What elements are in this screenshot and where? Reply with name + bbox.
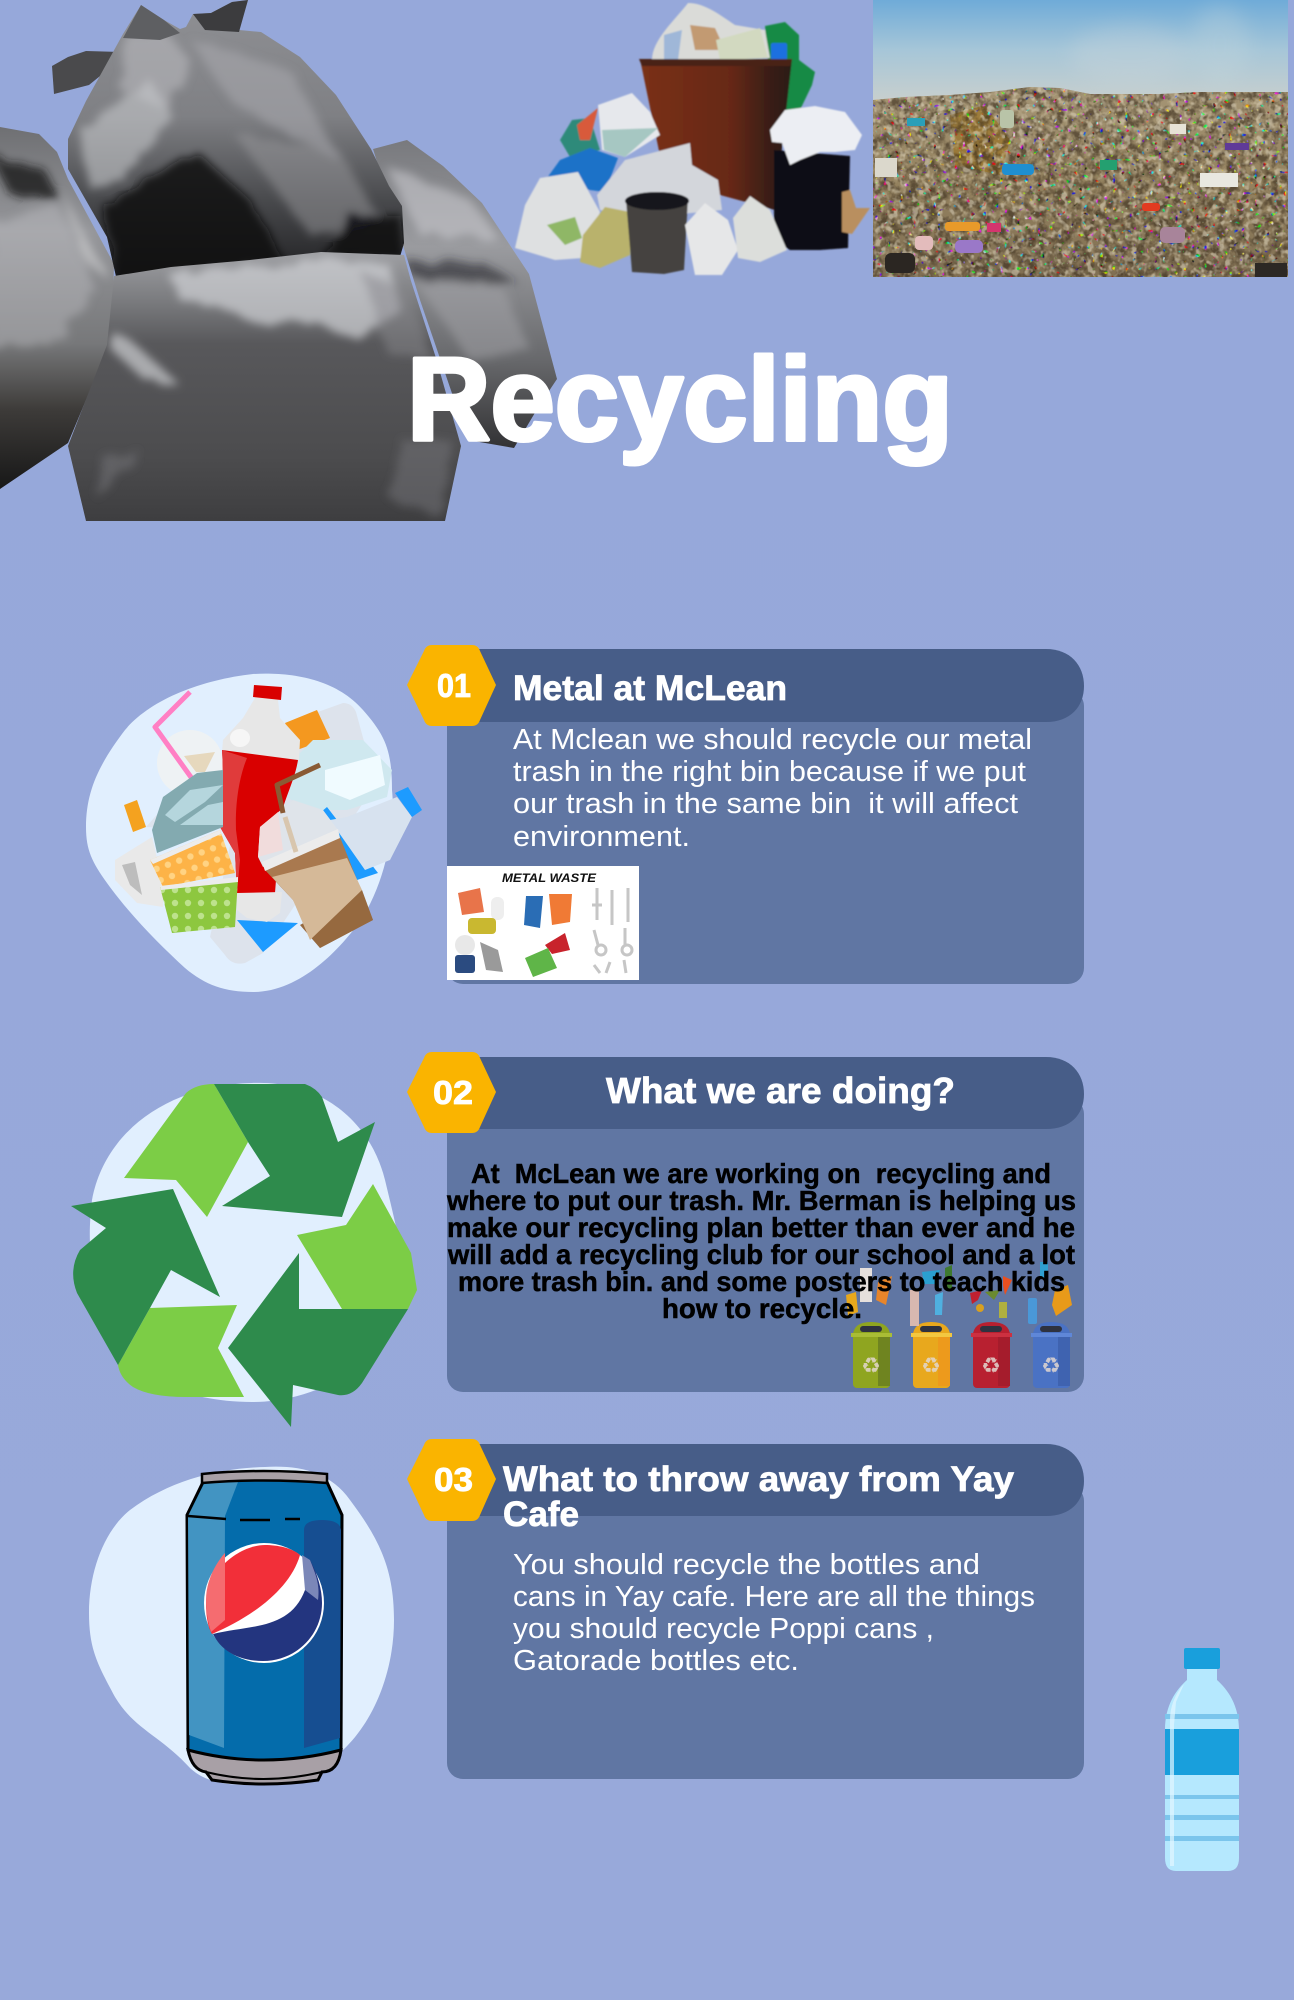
image: metal waste poster: METAL WASTE — [502, 871, 597, 885]
hexagon badge 03: 03 — [434, 1461, 473, 1498]
photo: black garbage bags — [0, 0, 560, 525]
icon: water bottle — [1165, 1648, 1239, 1871]
heading 3 — [503, 1460, 1015, 1534]
icon: four recycling bins with falling litter: ♻ — [981, 1353, 1001, 1378]
panel 2: what we are doing — [407, 1052, 1084, 1392]
icon: four recycling bins with falling litter — [846, 1262, 1072, 1388]
body text 3 — [513, 1549, 1035, 1677]
panel 1: metal at McLean — [407, 645, 1084, 984]
photo: overflowing trash bin with bags — [515, 3, 870, 275]
illustration: blue soda can on blob — [89, 1467, 394, 1785]
body text 2: make our recycling plan better than ever and he — [447, 1212, 1075, 1243]
header bar 3 — [470, 1444, 1084, 1516]
hexagon badge 01 — [407, 645, 496, 726]
body text 3: cans in Yay cafe. Here are all the things — [513, 1581, 1035, 1613]
illustration: recycling arrows on blob — [71, 1083, 417, 1427]
icon: four recycling bins with falling litter: ♻ — [921, 1353, 941, 1378]
body text 1: our trash in the same bin it will affect — [513, 788, 1018, 820]
body text 1: At Mclean we should recycle our metal — [513, 724, 1032, 756]
body text 2 — [446, 1158, 1076, 1324]
body text 3: you should recycle Poppi cans , — [513, 1613, 934, 1645]
header bar 2 — [470, 1057, 1084, 1129]
hexagon badge 02: 02 — [433, 1074, 473, 1111]
body text 3: You should recycle the bottles and — [513, 1549, 980, 1581]
body text 2: how to recycle. — [662, 1293, 862, 1324]
body text 1: trash in the right bin because if we put — [513, 756, 1026, 788]
body text 2: will add a recycling club for our school and a lot — [447, 1239, 1075, 1270]
body text 2: more trash bin. and some posters to teach kids — [458, 1266, 1065, 1297]
hexagon badge 01: 01 — [437, 667, 471, 704]
photo: landfill with smoky sky — [873, 0, 1288, 277]
body text 3: Gatorade bottles etc. — [513, 1645, 799, 1677]
hexagon badge 02 — [407, 1052, 496, 1133]
image: metal waste poster — [447, 866, 639, 980]
body text 1 — [513, 724, 1032, 853]
icon: four recycling bins with falling litter: ♻ — [1041, 1353, 1061, 1378]
heading 3: What to throw away from Yay — [503, 1460, 1015, 1499]
panel 3: what to throw away — [407, 1439, 1084, 1779]
heading 3: Cafe — [503, 1495, 579, 1534]
title: Recycling — [407, 334, 953, 466]
illustration: pile of plastic waste on blob — [86, 674, 422, 992]
body text 2: At McLean we are working on recycling and — [471, 1158, 1051, 1189]
icon: pepsi globe — [204, 1543, 324, 1663]
body text 2: where to put our trash. Mr. Berman is helping us — [446, 1185, 1076, 1216]
heading 2: What we are doing? — [606, 1070, 955, 1111]
heading 1: Metal at McLean — [513, 669, 787, 708]
header bar 1 — [470, 649, 1084, 722]
knot tail — [52, 51, 121, 94]
body text 1: environment. — [513, 821, 690, 853]
hexagon badge 03 — [407, 1439, 496, 1521]
icon: four recycling bins with falling litter: ♻ — [861, 1353, 881, 1378]
